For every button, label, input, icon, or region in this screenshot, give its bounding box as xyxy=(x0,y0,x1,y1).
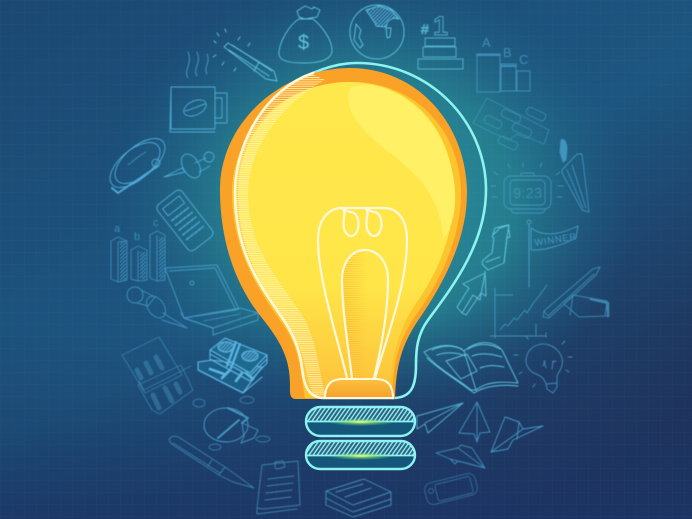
icon: up arrow two xyxy=(457,271,486,315)
bulb white outline xyxy=(235,73,393,398)
doodle icons ring xyxy=(102,5,608,517)
icon: money bag: $ xyxy=(298,32,309,54)
icon: paper plane three xyxy=(491,417,543,452)
left edge hatching xyxy=(235,74,326,396)
icon: pie chart xyxy=(193,396,270,450)
icon: bar chart a b c xyxy=(111,217,165,282)
icon: stacked books bottom xyxy=(326,479,391,517)
icon: bars A B C: B xyxy=(503,45,512,60)
icon: podium number one: # xyxy=(421,21,429,37)
icon: bar chart a b c: a xyxy=(114,223,121,235)
icon: push pin bottom xyxy=(127,287,187,328)
bulb yellow body xyxy=(238,82,454,398)
icon: pencil top xyxy=(213,29,277,81)
icon: globe xyxy=(350,5,404,59)
icon: bars A B C xyxy=(477,35,530,92)
icon: bar chart a b c: b xyxy=(134,231,140,243)
screw band one xyxy=(306,407,415,436)
icon: line chart xyxy=(490,285,547,338)
icon: pencil and eraser xyxy=(543,267,608,318)
icon: folder chart xyxy=(122,337,193,414)
icon: money bag xyxy=(279,6,332,63)
icon: smartphone xyxy=(423,472,479,506)
icon: podium number one xyxy=(418,11,463,69)
icon: money stacks xyxy=(198,338,267,393)
bulb highlight xyxy=(348,85,455,240)
icon: paper plane one xyxy=(417,403,463,433)
icon: bars A B C: C xyxy=(519,52,528,67)
icon: fountain pen xyxy=(169,436,254,488)
bulb inner amber layer xyxy=(232,82,461,398)
bulb base cap xyxy=(325,379,393,398)
icon: flow chart xyxy=(473,98,549,151)
icon: winner flag: WINNER xyxy=(534,231,578,249)
light bulb xyxy=(220,63,486,399)
bulb glass cyan outline xyxy=(313,63,486,398)
icon: up arrow one xyxy=(482,225,510,270)
icon: alarm clock xyxy=(491,163,563,213)
filament xyxy=(318,208,407,378)
icon: bar chart a b c: c xyxy=(153,217,159,229)
screw band two xyxy=(306,441,415,469)
icon: pens xyxy=(560,139,589,212)
icon: small bulb xyxy=(514,333,572,393)
icon: coin watch xyxy=(102,130,173,196)
filament inner hatching xyxy=(343,253,364,377)
icon: push pin top xyxy=(164,151,214,181)
icon: notes xyxy=(257,461,300,514)
icon: calculator xyxy=(155,188,215,253)
icon: alarm clock: 9:23 xyxy=(513,185,542,202)
icon: paper plane four xyxy=(436,445,485,468)
icon: open book xyxy=(424,343,518,393)
icon: coffee mug xyxy=(170,52,227,132)
icon: paper plane two xyxy=(459,402,490,442)
icon: laptop xyxy=(165,265,258,335)
icon: winner flag xyxy=(527,220,578,287)
icon: bars A B C: A xyxy=(482,35,491,50)
icon: podium number one: 1 xyxy=(433,11,448,41)
bulb orange body xyxy=(220,68,467,399)
